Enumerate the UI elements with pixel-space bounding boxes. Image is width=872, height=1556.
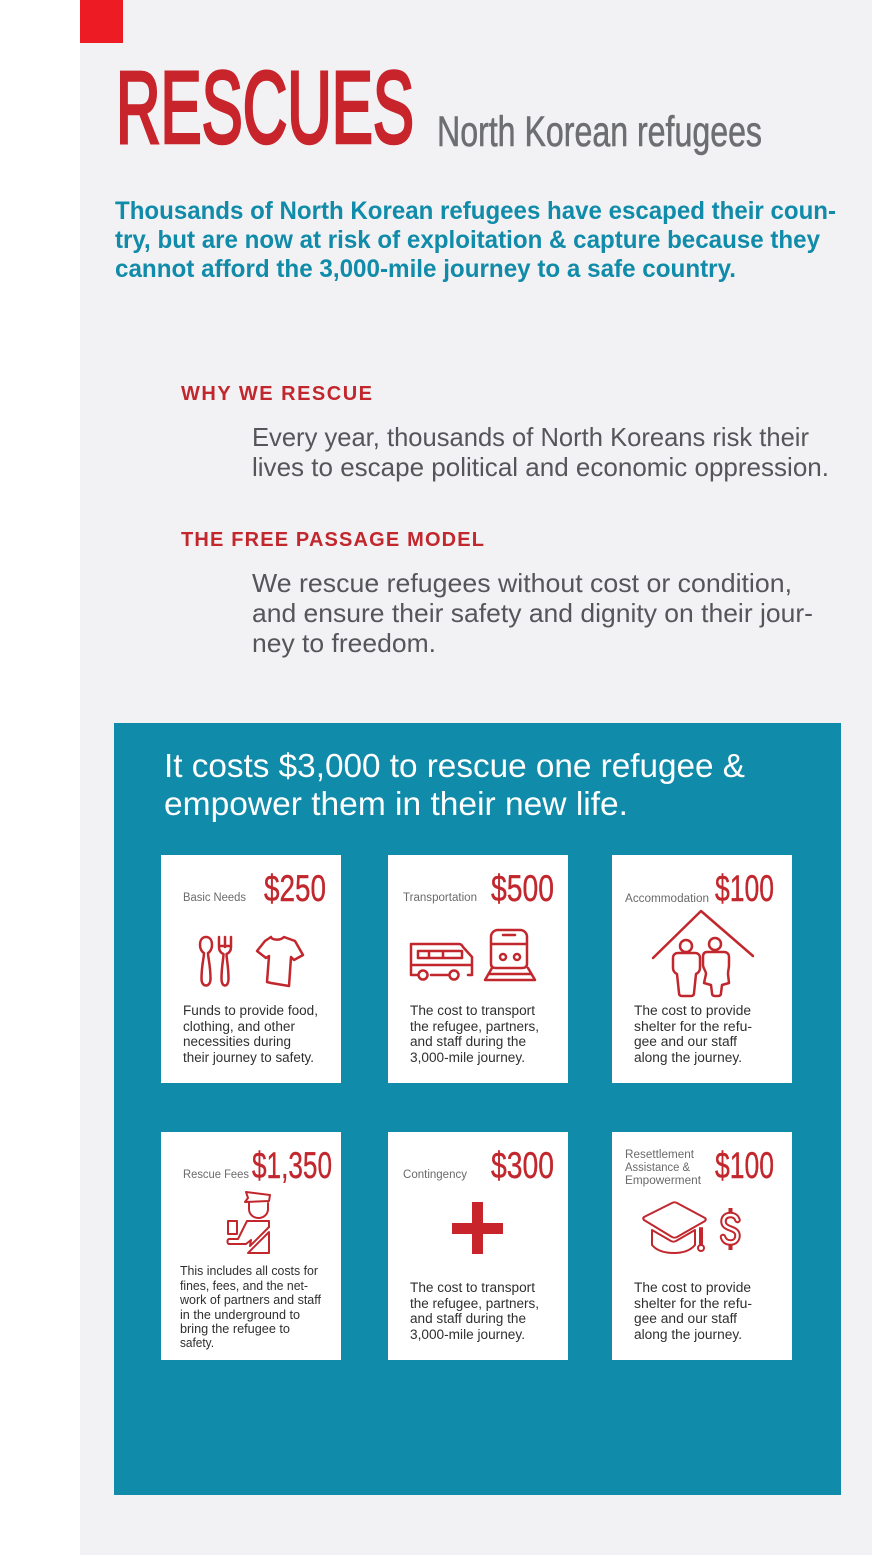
description: and staff during the bbox=[410, 1034, 526, 1049]
description: The cost to transport bbox=[410, 1280, 535, 1295]
card: transportation: Transportation bbox=[403, 892, 477, 904]
description bbox=[634, 1003, 752, 1065]
icon: two people under a roof bbox=[653, 911, 753, 996]
description: gee and our staff bbox=[634, 1311, 737, 1326]
intro text: cannot afford the 3,000-mile journey to a safe country. bbox=[115, 255, 736, 283]
description: and staff during the bbox=[410, 1311, 526, 1326]
card label bbox=[625, 1149, 702, 1187]
card: basic needs: Basic Needs bbox=[183, 892, 246, 904]
card: contingency: Contingency bbox=[403, 1169, 467, 1181]
description: The cost to provide bbox=[634, 1280, 751, 1295]
description: safety. bbox=[180, 1335, 214, 1350]
description: in the underground to bbox=[180, 1307, 300, 1322]
card label: Empowerment bbox=[625, 1175, 702, 1187]
panel: cost breakdown bbox=[114, 723, 841, 1495]
description: The cost to transport bbox=[410, 1003, 535, 1018]
description: The cost to provide bbox=[634, 1003, 751, 1018]
description: work of partners and staff bbox=[179, 1292, 321, 1307]
description: the refugee, partners, bbox=[410, 1296, 539, 1311]
icon: bus and train bbox=[411, 930, 535, 980]
description bbox=[183, 1003, 318, 1065]
card: rescue fees: $1,350 bbox=[252, 1145, 332, 1186]
description: the refugee, partners, bbox=[410, 1019, 539, 1034]
description: fines, fees, and the net- bbox=[180, 1278, 308, 1293]
card: transportation bbox=[388, 855, 568, 1083]
card: basic needs bbox=[161, 855, 341, 1083]
card: basic needs: $250 bbox=[264, 868, 326, 909]
description: shelter for the refu- bbox=[634, 1019, 752, 1034]
card: accommodation: Accommodation bbox=[625, 893, 709, 905]
description bbox=[410, 1280, 539, 1342]
section: the free passage model: THE FREE PASSAGE MODEL bbox=[181, 529, 484, 551]
panel heading: empower them in their new life. bbox=[164, 785, 628, 822]
intro text: try, but are now at risk of exploitation & capture because they bbox=[115, 226, 820, 254]
description: gee and our staff bbox=[634, 1034, 737, 1049]
icon: spoon, fork and shirt bbox=[200, 937, 303, 986]
red corner square bbox=[80, 0, 123, 43]
description bbox=[410, 1003, 539, 1065]
description: This includes all costs for bbox=[180, 1263, 319, 1278]
description: clothing, and other bbox=[183, 1019, 295, 1034]
card: contingency: $300 bbox=[491, 1145, 554, 1186]
section: the free passage model: ney to freedom. bbox=[252, 628, 436, 658]
description: Funds to provide food, bbox=[183, 1003, 318, 1018]
icon: graduation cap and dollar sign bbox=[643, 1202, 738, 1253]
card: accommodation bbox=[612, 855, 792, 1083]
description bbox=[179, 1263, 321, 1350]
card: rescue fees bbox=[161, 1132, 341, 1360]
description bbox=[634, 1280, 752, 1342]
section: the free passage model bbox=[181, 529, 813, 658]
intro text: Thousands of North Korean refugees have escaped their coun- bbox=[115, 197, 836, 225]
section: the free passage model: We rescue refugees without cost or condition, bbox=[252, 568, 792, 598]
section: the free passage model: and ensure their safety and dignity on their jour- bbox=[252, 598, 813, 628]
card: resettlement bbox=[612, 1132, 792, 1360]
card: rescue fees: Rescue Fees bbox=[183, 1169, 249, 1181]
section: why we rescue: Every year, thousands of North Koreans risk their bbox=[252, 422, 809, 452]
description: shelter for the refu- bbox=[634, 1296, 752, 1311]
card label: Assistance & bbox=[625, 1162, 690, 1174]
card: accommodation: $100 bbox=[715, 868, 774, 909]
description: their journey to safety. bbox=[183, 1050, 314, 1065]
section: why we rescue bbox=[181, 383, 829, 482]
description: 3,000-mile journey. bbox=[410, 1327, 525, 1342]
section: why we rescue: WHY WE RESCUE bbox=[181, 383, 372, 405]
card: resettlement: $100 bbox=[715, 1145, 774, 1186]
description: along the journey. bbox=[634, 1050, 742, 1065]
panel heading bbox=[164, 747, 745, 822]
title: RESCUES bbox=[116, 50, 414, 164]
description: necessities during bbox=[183, 1034, 291, 1049]
panel heading: It costs $3,000 to rescue one refugee & bbox=[164, 747, 745, 784]
card: contingency bbox=[388, 1132, 568, 1360]
card: transportation: $500 bbox=[491, 868, 554, 909]
card label: Resettlement bbox=[625, 1149, 695, 1161]
icon: medical cross bbox=[452, 1202, 503, 1254]
icon: border officer bbox=[228, 1192, 270, 1253]
description: 3,000-mile journey. bbox=[410, 1050, 525, 1065]
title: North Korean refugees bbox=[437, 108, 762, 156]
description: bring the refugee to bbox=[180, 1321, 290, 1336]
description: along the journey. bbox=[634, 1327, 742, 1342]
intro text bbox=[115, 197, 836, 283]
section: why we rescue: lives to escape political and economic oppression. bbox=[252, 452, 829, 482]
